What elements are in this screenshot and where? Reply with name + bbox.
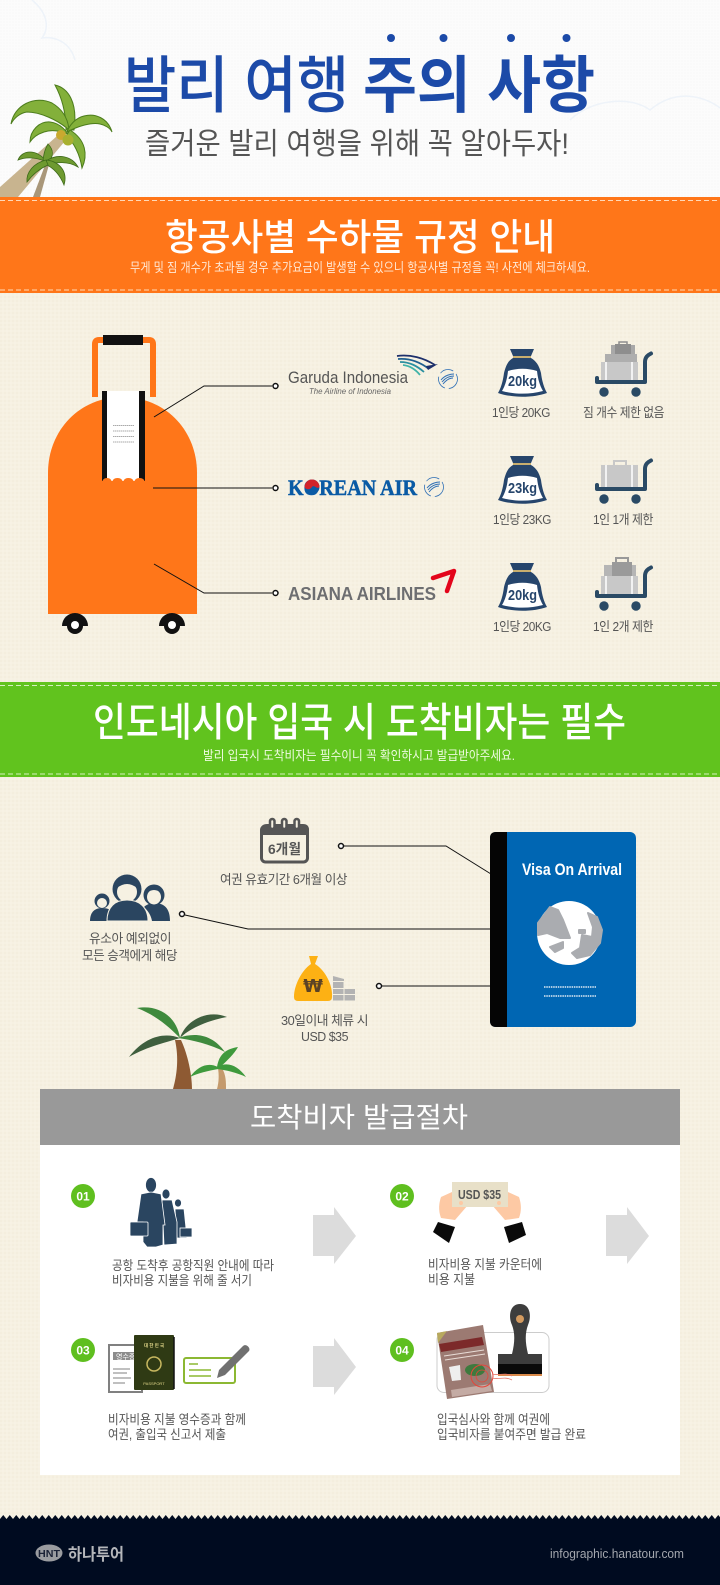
logo: Korean Air: KOREAN AIR xyxy=(288,475,418,500)
label: no limit: 짐 개수 제한 없음 xyxy=(583,405,664,420)
logo: Asiana Airlines: ASIANA AIRLINES xyxy=(288,583,436,604)
step 02 text: 비자비용 지불 카운터에 xyxy=(428,1257,542,1272)
label: all passengers: 유소아 예외없이 xyxy=(89,931,171,946)
step 01 badge: 01 xyxy=(76,1190,90,1204)
step 02 text: 비용 지불 xyxy=(428,1272,475,1287)
step 03 text: 비자비용 지불 영수증과 함께 xyxy=(108,1412,246,1427)
icon: receipt and passport: 대 한 민 국 xyxy=(144,1342,164,1349)
step 01 text xyxy=(112,1258,274,1288)
icon: weight bag 20kg: 20kg xyxy=(508,373,537,390)
label: fee: USD $35 xyxy=(301,1029,348,1044)
icon: weight bag 23kg xyxy=(498,456,547,504)
step 04 badge xyxy=(390,1338,414,1362)
icon: visa booklet xyxy=(490,832,636,1027)
label: fee: 30일이내 체류 시 xyxy=(281,1013,368,1028)
step 03 text: 여권, 출입국 신고서 제출 xyxy=(108,1427,226,1442)
icon: family group xyxy=(90,874,170,921)
logo: Garuda Indonesia xyxy=(288,355,458,396)
footer logo xyxy=(36,1544,124,1564)
step 04 badge: 04 xyxy=(395,1344,409,1358)
icon: calendar 6 months xyxy=(261,819,309,862)
icon: stamp and visa document xyxy=(437,1304,549,1399)
logo: Asiana Airlines xyxy=(288,571,454,604)
step 01 text: 공항 도착후 공항직원 안내에 따라 xyxy=(112,1258,274,1273)
icon: money bag with bricks: ₩ xyxy=(303,976,323,997)
globe xyxy=(537,901,602,965)
icon: visa booklet: Visa On Arrival xyxy=(522,860,622,879)
label: two bags: 1인 2개 제한 xyxy=(593,619,653,634)
footer url: infographic.hanatour.com xyxy=(550,1546,684,1561)
logo: Garuda Indonesia: Garuda Indonesia xyxy=(288,368,408,387)
banner: baggage rules xyxy=(0,197,720,293)
label: fee xyxy=(281,1013,368,1044)
connector: fee xyxy=(376,984,491,988)
icon: receipt and passport: 영수증 xyxy=(116,1352,136,1361)
icon: form and pen xyxy=(184,1345,249,1383)
banner note: visa: 발리 입국시 도착비자는 필수이니 꼭 확인하시고 발급받아주세요. xyxy=(203,748,515,763)
step 02 text xyxy=(428,1257,542,1287)
connector: Korean Air xyxy=(153,486,278,490)
icon: weight bag 20kg xyxy=(498,349,547,397)
icon: coconut palm xyxy=(0,85,112,197)
step 01 badge xyxy=(71,1184,95,1208)
footer logo: 하나투어 xyxy=(68,1545,124,1564)
icon: receipt and passport xyxy=(109,1335,174,1392)
step 04 text: 입국심사와 함께 여권에 xyxy=(437,1412,550,1427)
icon: receipt and passport: PASSPORT xyxy=(143,1381,165,1386)
procedure header: 도착비자 발급절차 xyxy=(250,1102,468,1133)
title: 주의 사항 xyxy=(363,52,595,121)
banner: visa on arrival xyxy=(0,682,720,777)
subtitle: 즐거운 발리 여행을 위해 꼭 알아두자! xyxy=(145,128,569,161)
step 03 text xyxy=(108,1412,246,1442)
banner note: baggage: 무게 및 짐 개수가 초과될 경우 추가요금이 발생할 수 있으니 항공사별 규정을 꼭! 사전에 체크하세요. xyxy=(130,260,590,275)
connector: Garuda xyxy=(154,384,278,417)
label: all passengers: 모든 승객에게 해당 xyxy=(82,948,178,963)
connector: validity xyxy=(338,844,491,874)
footer xyxy=(0,1515,720,1585)
step 04 text xyxy=(437,1412,586,1442)
step 01 text: 비자비용 지불을 위해 줄 서기 xyxy=(112,1273,252,1288)
label: 23kg per person: 1인당 23KG xyxy=(493,512,551,527)
step 03 badge: 03 xyxy=(76,1344,90,1358)
illustration: orange suitcase xyxy=(48,335,197,634)
icon: cart unlimited xyxy=(597,342,651,397)
title xyxy=(124,34,595,121)
step 04 text: 입국비자를 붙여주면 발급 완료 xyxy=(437,1427,586,1442)
label: 20kg per person second: 1인당 20KG xyxy=(493,619,551,634)
footer logo: HNT xyxy=(38,1549,60,1560)
label: all passengers xyxy=(82,931,178,963)
connector: Asiana xyxy=(154,564,278,596)
logo: Garuda Indonesia: The Airline of Indonesia xyxy=(309,387,392,396)
label: one bag: 1인 1개 제한 xyxy=(593,512,653,527)
wheels xyxy=(62,613,185,634)
icon: weight bag 23kg: 23kg xyxy=(508,480,537,497)
arrow 2 xyxy=(606,1207,649,1264)
icon: calendar 6 months: 6개월 xyxy=(268,841,301,857)
arrow 3 xyxy=(313,1338,356,1395)
icon: queue of travellers xyxy=(130,1178,192,1247)
luggage tag xyxy=(102,391,145,484)
step 02 badge xyxy=(390,1184,414,1208)
label: 20kg per person: 1인당 20KG xyxy=(492,405,550,420)
icon: hands holding money: USD $35 xyxy=(458,1188,501,1202)
banner heading: visa: 인도네시아 입국 시 도착비자는 필수 xyxy=(93,701,626,745)
banner heading: baggage: 항공사별 수하물 규정 안내 xyxy=(165,217,555,258)
label: passport validity: 여권 유효기간 6개월 이상 xyxy=(220,872,348,887)
procedure header xyxy=(40,1089,680,1145)
step 02 badge: 02 xyxy=(395,1190,409,1204)
header background xyxy=(0,0,720,197)
icon: money bag with bricks xyxy=(294,956,355,1001)
icon: weight bag 20kg second: 20kg xyxy=(508,587,537,604)
icon: hands holding money xyxy=(433,1182,526,1243)
step 03 badge xyxy=(71,1338,95,1362)
icon: cart two bags xyxy=(597,558,651,611)
arrow 1 xyxy=(313,1207,356,1264)
icon: cart one bag xyxy=(597,460,651,504)
panel: visa procedure xyxy=(40,1089,680,1475)
title: 발리 여행 xyxy=(124,52,349,121)
connector: passengers xyxy=(180,912,491,929)
icon: weight bag 20kg second xyxy=(498,563,547,611)
illustration: palm trees xyxy=(129,1007,246,1089)
